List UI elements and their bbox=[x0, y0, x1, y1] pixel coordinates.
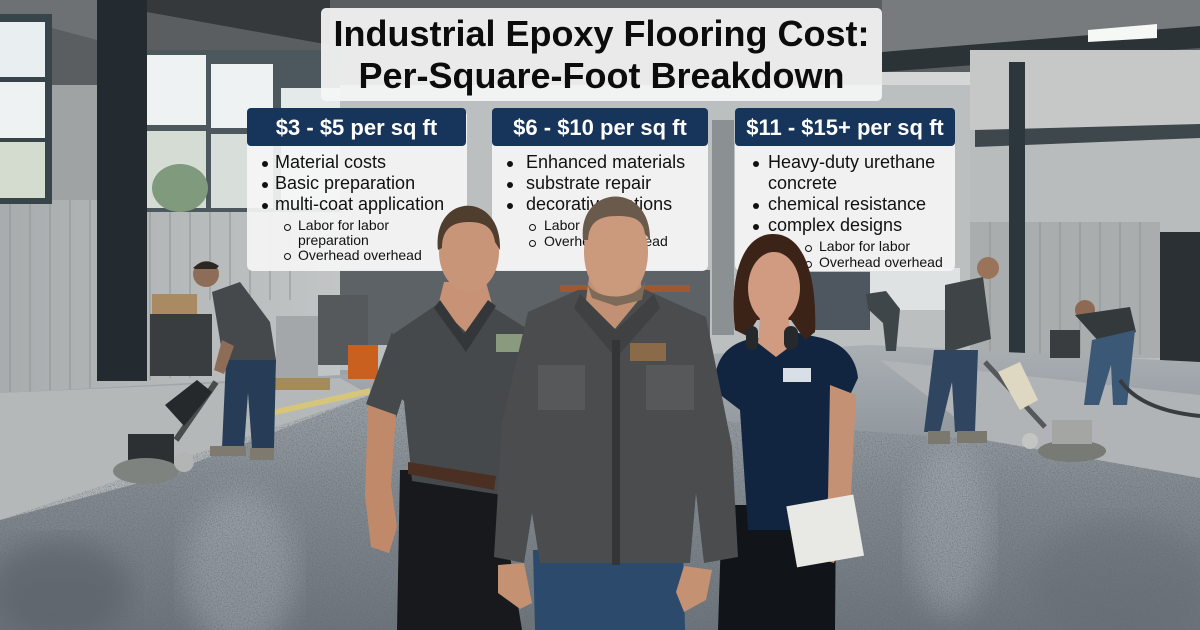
tier list: multi-coat application bbox=[275, 194, 444, 214]
title line 1: Industrial Epoxy Flooring Cost: bbox=[333, 13, 870, 54]
main window bbox=[143, 50, 343, 212]
floor bbox=[0, 340, 1200, 630]
ceiling bbox=[0, 0, 1200, 115]
dark steel column bbox=[97, 0, 147, 381]
back wall bbox=[0, 0, 1200, 400]
tier heading bbox=[247, 108, 466, 146]
tier list: chemical resistance bbox=[768, 194, 926, 214]
tier heading: $11 - $15+ per sq ft bbox=[746, 115, 944, 140]
tier list: Labor for labor bbox=[298, 217, 389, 233]
tier list: Basic preparation bbox=[275, 173, 415, 193]
floor machine right bbox=[985, 362, 1200, 462]
title banner bbox=[321, 8, 882, 101]
tier list: Overhead overhead bbox=[298, 247, 422, 263]
title line 2: Per-Square-Foot Breakdown bbox=[358, 55, 845, 96]
right rear workers bbox=[866, 257, 1136, 444]
man left: grey polo bbox=[365, 282, 534, 630]
panel: $6 - $10 tier bbox=[492, 110, 708, 271]
tier heading bbox=[735, 108, 955, 146]
tier list bbox=[753, 152, 943, 270]
tier heading bbox=[492, 108, 708, 146]
tier heading: $3 - $5 per sq ft bbox=[276, 115, 437, 140]
tier list bbox=[262, 152, 444, 263]
tier list: Material costs bbox=[275, 152, 386, 172]
woman right: navy polo bbox=[714, 234, 864, 630]
floor grinder left bbox=[113, 380, 216, 484]
tier list bbox=[507, 152, 685, 249]
tier heading: $6 - $10 per sq ft bbox=[513, 115, 687, 140]
right wall panels bbox=[970, 50, 1200, 362]
man centre: grey overshirt bbox=[494, 270, 738, 630]
panel: $3 - $5 tier bbox=[247, 110, 467, 271]
tier list: substrate repair bbox=[526, 173, 651, 193]
tier list: decorative options bbox=[526, 194, 672, 214]
back left equipment bbox=[150, 294, 378, 390]
worker left bbox=[193, 261, 276, 460]
panel: $11 - $15+ tier bbox=[735, 110, 955, 271]
tier list: concrete bbox=[768, 173, 837, 193]
tier list: preparation bbox=[298, 232, 369, 248]
centre back of shop bbox=[340, 85, 970, 370]
left wall panels bbox=[0, 200, 340, 395]
tier list: Overhead overhead bbox=[819, 254, 943, 270]
tier list: Labor for labor bbox=[544, 217, 635, 233]
tier list: Labor for labor bbox=[819, 238, 910, 254]
tier list: Overhead overhead bbox=[544, 233, 668, 249]
left window bbox=[0, 14, 52, 204]
tier list: complex designs bbox=[768, 215, 902, 235]
tier list: Heavy-duty urethane bbox=[768, 152, 935, 172]
tier list: Enhanced materials bbox=[526, 152, 685, 172]
